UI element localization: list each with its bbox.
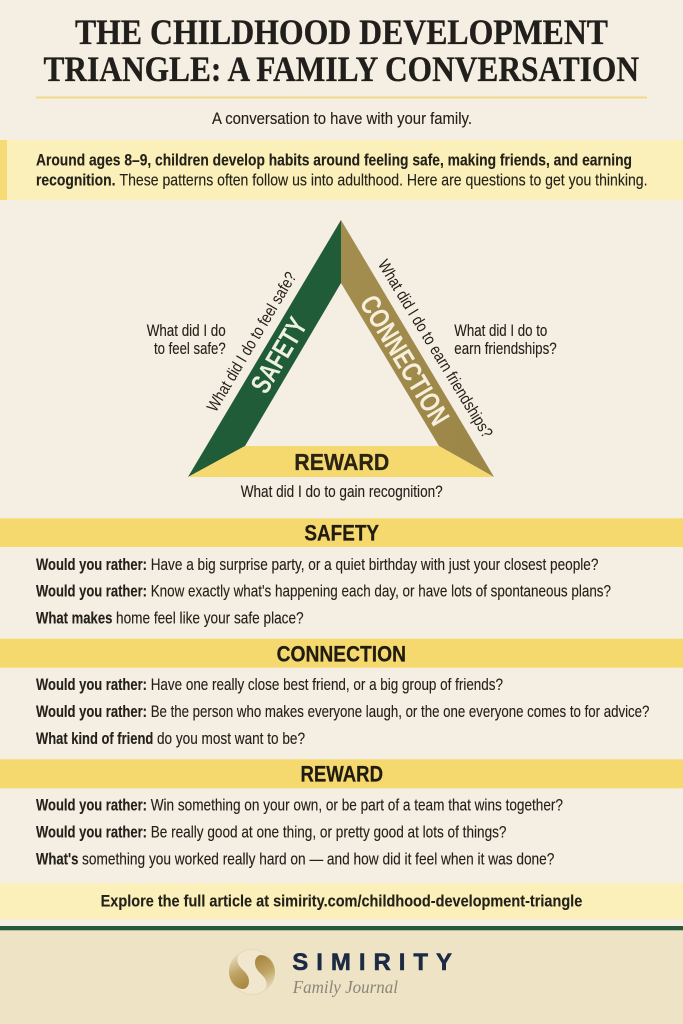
question 1: Have a big surprise party, or a quiet birthday with just your closest people? (151, 556, 598, 574)
question 1: Would you rather: (36, 556, 147, 574)
question 3 (36, 609, 304, 627)
panel: intro callout (0, 140, 683, 200)
brand name: SIMIRITY (292, 949, 452, 976)
heading band: safety (0, 518, 683, 547)
panel: footer (0, 926, 683, 1024)
triangle side: connection (341, 220, 494, 477)
question 3: something you worked really hard on — and how did it feel when it was done? (82, 850, 554, 868)
angled question: safety: What did I do to feel safe? (204, 269, 300, 415)
title: THE CHILDHOOD DEVELOPMENT (75, 12, 608, 52)
side question: safety (147, 322, 226, 358)
panel: connection (0, 639, 683, 748)
bottom question: reward: What did I do to gain recognition? (241, 483, 443, 501)
triangle side: safety (188, 220, 341, 477)
heading band: reward: REWARD (300, 762, 383, 787)
panel: reward (0, 759, 683, 868)
panel: safety (0, 518, 683, 627)
label: reward: REWARD (294, 449, 389, 475)
question 1 (36, 797, 563, 815)
question 2: Would you rather: (36, 583, 147, 601)
heading band: connection: CONNECTION (277, 642, 406, 667)
question 1: Have one really close best friend, or a big group of friends? (151, 676, 503, 694)
question 1 (36, 556, 598, 574)
question 1: Win something on your own, or be part of a team that wins together? (151, 797, 563, 815)
triangle side: reward (188, 446, 494, 477)
question 3: What's (36, 850, 78, 868)
question 3: home feel like your safe place? (116, 609, 304, 627)
side question: connection: What did I do to (454, 322, 547, 340)
question 1: Would you rather: (36, 797, 147, 815)
triangle diagram (147, 220, 557, 501)
subtitle: A conversation to have with your family. (212, 110, 472, 128)
label: safety: SAFETY (245, 312, 313, 398)
call to action band: Explore the full article at simirity.com/childhood-development-triangle (101, 893, 582, 911)
intro text: recognition. (36, 172, 116, 190)
side question: connection: earn friendships? (454, 340, 557, 358)
question 3: What kind of friend (36, 730, 153, 748)
call to action band (0, 883, 683, 919)
question 2: Would you rather: (36, 824, 147, 842)
title (44, 12, 639, 89)
brand tagline: Family Journal (292, 977, 398, 997)
heading band: connection (0, 639, 683, 668)
question 2: Would you rather: (36, 703, 147, 721)
question 3 (36, 730, 305, 748)
side question: safety: to feel safe? (154, 340, 226, 358)
side question: connection (454, 322, 557, 358)
intro text (36, 152, 648, 190)
question 1: Would you rather: (36, 676, 147, 694)
angled question: connection: What did I do to earn friendships? (374, 257, 496, 441)
heading band: reward (0, 759, 683, 788)
question 2 (36, 824, 506, 842)
icon: simirity logo (229, 950, 275, 994)
question 3: do you most want to be? (157, 730, 305, 748)
side question: safety: What did I do (147, 322, 226, 340)
label: connection: CONNECTION (354, 290, 455, 431)
question 1 (36, 676, 503, 694)
question 3: What makes (36, 609, 112, 627)
heading band: safety: SAFETY (304, 521, 379, 546)
question 2: Be really good at one thing, or pretty good at lots of things? (151, 824, 506, 842)
